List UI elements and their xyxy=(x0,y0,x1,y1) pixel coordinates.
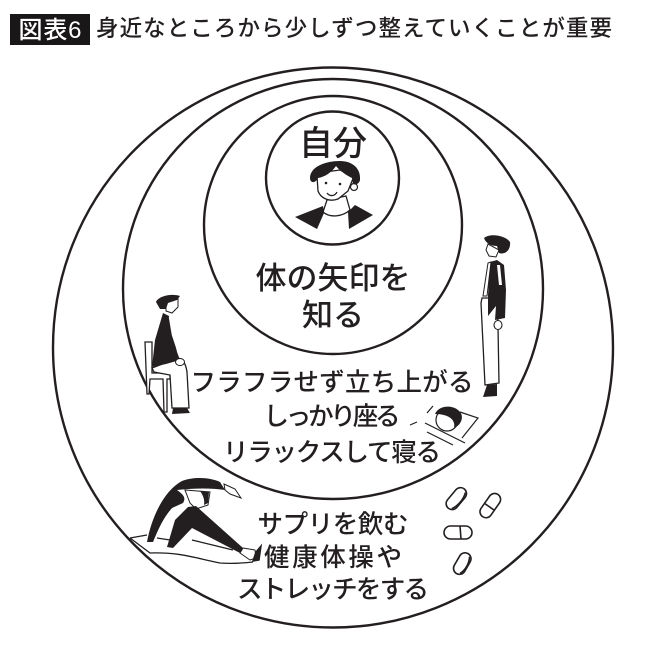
pill 2 xyxy=(478,491,503,520)
label: outer circle habits: 健康体操や xyxy=(264,544,402,572)
icon: seated person on chair xyxy=(145,295,190,414)
label: daily habits: フラフラせず立ち上がる xyxy=(190,369,474,397)
label: outer circle habits: ストレッチをする xyxy=(237,576,429,604)
label: daily habits xyxy=(190,369,474,467)
heading xyxy=(10,14,612,45)
icon: person sleeping in bed xyxy=(410,406,478,445)
label: outer circle habits: サプリを飲む xyxy=(258,511,408,539)
label: outer circle habits xyxy=(237,511,429,604)
heading badge xyxy=(10,14,90,45)
label: know body vector: 体の矢印を xyxy=(256,261,410,296)
pill 4 xyxy=(451,551,473,577)
concentric circles xyxy=(53,68,613,628)
icon: standing person xyxy=(481,235,510,397)
icon: stretching person xyxy=(130,478,261,563)
pill 1 xyxy=(444,485,469,512)
heading badge: 図表6 xyxy=(18,17,82,44)
icon: person portrait xyxy=(295,161,373,229)
label: daily habits: リラックスして寝る xyxy=(223,439,441,467)
icon: supplement pills xyxy=(444,485,503,577)
label: know body vector xyxy=(256,261,410,333)
heading text: 身近なところから少しずつ整えていくことが重要 xyxy=(96,16,612,41)
label: self: 自分 xyxy=(299,125,367,163)
label: know body vector: 知る xyxy=(302,298,364,333)
label: daily habits: しっかり座る xyxy=(264,403,400,431)
pill 3 xyxy=(444,526,472,539)
